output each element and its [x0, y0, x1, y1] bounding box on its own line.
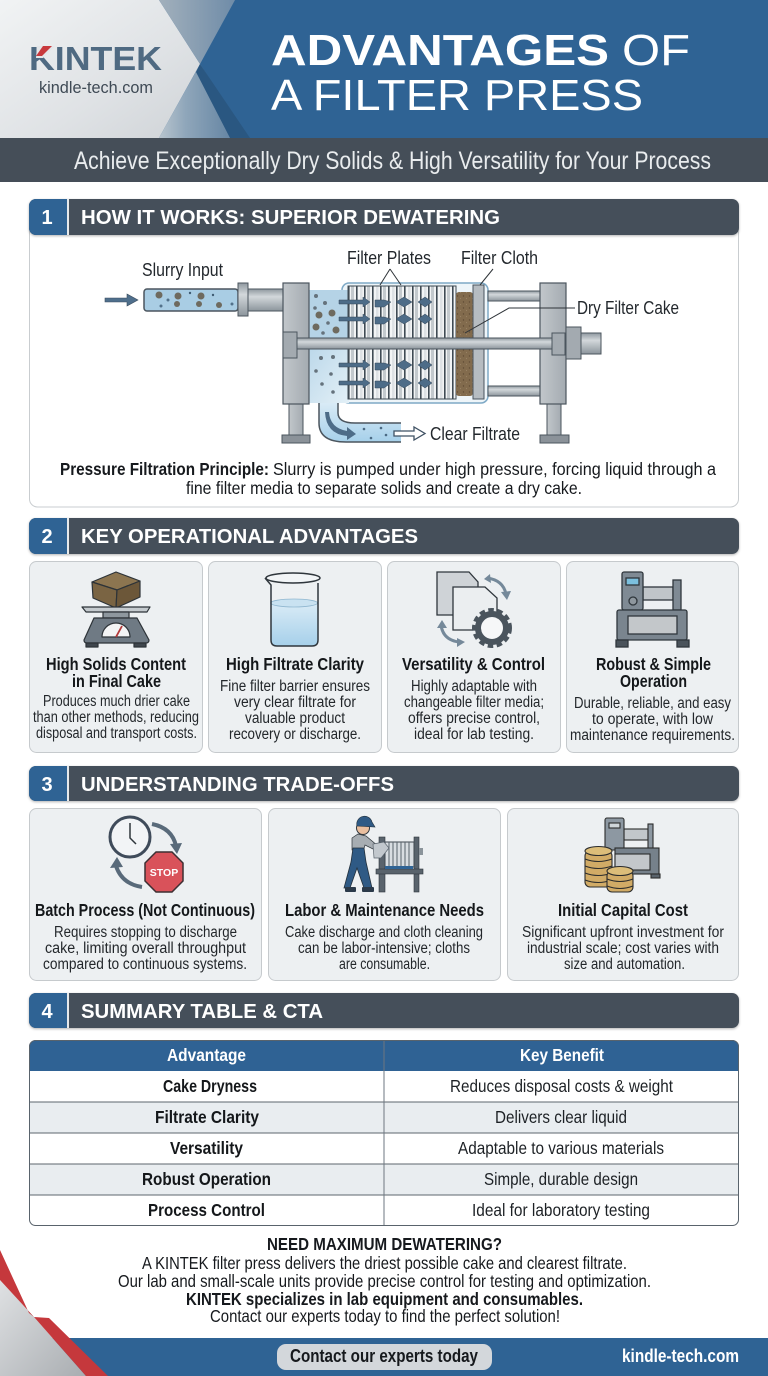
label: Slurry Input: Slurry Input: [142, 260, 223, 280]
card text: industrial scale; cost varies with: [527, 940, 719, 957]
card title: in Final Cake: [72, 671, 161, 691]
section 4 heading: [29, 993, 739, 1028]
section 3 heading: UNDERSTANDING TRADE-OFFS: [81, 774, 394, 796]
summary table: Robust Operation: [142, 1169, 271, 1189]
pressure filtration text: Pressure Filtration Principle:: [60, 459, 269, 479]
label: Filter Plates: Filter Plates: [347, 248, 431, 268]
summary table: Reduces disposal costs & weight: [450, 1076, 673, 1096]
card text: [570, 695, 735, 744]
label: Dry Filter Cake: [465, 298, 679, 333]
card title: Batch Process (Not Continuous): [35, 900, 255, 920]
filter chamber: [309, 283, 488, 403]
call to action text: Contact our experts today to find the perfect solution!: [210, 1306, 560, 1326]
summary table: Key Benefit: [520, 1045, 604, 1065]
label: Filter Plates: [347, 248, 431, 285]
summary table: Process Control: [148, 1200, 265, 1220]
summary table: [29, 1040, 739, 1226]
summary table: Cake Dryness: [163, 1076, 257, 1096]
card text: very clear filtrate for: [234, 694, 356, 711]
title: ADVANTAGES: [271, 26, 609, 75]
inlet flange and pipe: [238, 283, 284, 316]
card text: offers precise control,: [408, 710, 540, 727]
summary table: Filtrate Clarity: [155, 1107, 259, 1127]
flow arrows: [339, 297, 432, 388]
filter press diagram: [105, 248, 679, 444]
card text: [404, 678, 544, 743]
label: Filter Cloth: Filter Cloth: [461, 248, 538, 268]
footer button: Contact our experts today: [290, 1346, 478, 1366]
card: versatility: [388, 562, 560, 752]
pressure filtration text: Slurry is pumped under high pressure, forcing liquid through a: [273, 459, 716, 479]
title: [271, 26, 690, 120]
title: A FILTER PRESS: [271, 71, 643, 120]
card text: Significant upfront investment for: [522, 924, 724, 941]
card text: recovery or discharge.: [229, 726, 361, 743]
call to action text: NEED MAXIMUM DEWATERING?: [267, 1234, 502, 1254]
icon: clock and stop sign: [110, 817, 183, 892]
call to action text: A KINTEK filter press delivers the driest possible cake and clearest filtrate.: [142, 1253, 627, 1273]
card: labor and maintenance: [268, 808, 500, 980]
logo: KINTEK: KINTEK: [29, 41, 162, 78]
card text: [285, 924, 483, 973]
label: Clear Filtrate: Clear Filtrate: [430, 424, 520, 444]
card text: Highly adaptable with: [411, 678, 537, 695]
card text: are consumable.: [339, 956, 430, 973]
icon: clock and stop sign: STOP: [150, 867, 178, 879]
card text: maintenance requirements.: [570, 727, 735, 744]
header band: [0, 0, 768, 138]
summary table: Advantage: [167, 1045, 246, 1065]
label: Dry Filter Cake: Dry Filter Cake: [577, 298, 679, 318]
call to action text: KINTEK specializes in lab equipment and consumables.: [186, 1289, 583, 1309]
pressure filtration text: fine filter media to separate solids and create a dry cake.: [186, 478, 582, 498]
footer url: kindle-tech.com: [622, 1346, 739, 1366]
slurry pipe: [144, 289, 238, 311]
section 3 heading: [29, 766, 739, 801]
card: robust: [566, 562, 738, 752]
summary table: Adaptable to various materials: [458, 1138, 664, 1158]
card text: valuable product: [245, 710, 346, 727]
section 1 heading: [29, 199, 739, 235]
icon: compact press: [616, 572, 689, 647]
section 2 heading: 2: [41, 526, 53, 548]
filter cake: [456, 292, 473, 396]
card title: Operation: [620, 671, 687, 691]
card text: size and automation.: [564, 956, 685, 973]
call to action text: [118, 1234, 651, 1326]
card text: can be labor-intensive; cloths: [298, 940, 470, 957]
card text: Produces much drier cake: [43, 693, 190, 710]
card title: Versatility & Control: [402, 654, 545, 674]
card text: Cake discharge and cloth cleaning: [285, 924, 483, 941]
label: Filter Cloth: [461, 248, 538, 285]
footer band: [0, 1250, 768, 1376]
card text: changeable filter media;: [404, 694, 544, 711]
card: batch process: [30, 808, 262, 980]
section 1 heading: HOW IT WORKS: SUPERIOR DEWATERING: [81, 207, 500, 229]
icon: cake on scale: [82, 572, 150, 647]
card title: [596, 654, 711, 691]
card title: Initial Capital Cost: [558, 900, 688, 920]
icon: worker at press: [344, 816, 423, 892]
summary table: Simple, durable design: [484, 1169, 638, 1189]
pressure filtration text: [60, 459, 716, 498]
card title: High Filtrate Clarity: [226, 654, 364, 674]
summary table: Ideal for laboratory testing: [472, 1200, 650, 1220]
arrow: clear filtrate: [394, 427, 425, 440]
section 4 heading: SUMMARY TABLE & CTA: [81, 1001, 323, 1023]
press frame: [282, 283, 601, 443]
section 3 heading: 3: [41, 774, 53, 796]
section 2 heading: [29, 518, 739, 554]
logo: KINTEK: [29, 41, 162, 97]
arrow: slurry in: [105, 294, 138, 306]
footer button: [277, 1344, 492, 1370]
card title: Labor & Maintenance Needs: [285, 900, 484, 920]
tie bars: [488, 291, 540, 396]
call to action text: Our lab and small-scale units provide precise control for testing and optimization.: [118, 1271, 651, 1291]
card text: Durable, reliable, and easy: [574, 695, 731, 712]
section 4 heading: 4: [41, 1001, 53, 1023]
card text: ideal for lab testing.: [414, 726, 534, 743]
card text: Fine filter barrier ensures: [220, 678, 370, 695]
card title: Robust & Simple: [596, 654, 711, 674]
card text: to operate, with low: [592, 711, 714, 728]
card text: Requires stopping to discharge: [54, 924, 237, 941]
logo: KINTEK: kindle-tech.com: [39, 78, 153, 97]
card text: [220, 678, 370, 743]
summary table: Versatility: [170, 1138, 243, 1158]
card: filtrate clarity: [208, 562, 382, 752]
subtitle band: [0, 138, 768, 182]
card text: [522, 924, 724, 973]
section 1 heading: 1: [41, 207, 53, 229]
icon: beaker: [265, 573, 320, 646]
title: OF: [622, 26, 690, 75]
card: high solids: [30, 562, 202, 752]
card title: High Solids Content: [46, 654, 186, 674]
icon: machine and coins: [585, 818, 660, 892]
filtrate outlet: [319, 403, 401, 442]
summary table: Delivers clear liquid: [495, 1107, 627, 1127]
card text: disposal and transport costs.: [36, 725, 197, 742]
card title: [46, 654, 186, 691]
card text: compared to continuous systems.: [43, 956, 247, 973]
section 2 heading: KEY OPERATIONAL ADVANTAGES: [81, 526, 418, 548]
filter cloth plate: [473, 285, 484, 399]
card text: [33, 693, 199, 742]
panel: how it works: [29, 199, 739, 507]
card text: [43, 924, 247, 973]
card: capital cost: [508, 808, 738, 980]
card text: than other methods, reducing: [33, 709, 199, 726]
icon: filter media and gear: [437, 572, 511, 647]
card text: cake, limiting overall throughput: [45, 940, 247, 957]
